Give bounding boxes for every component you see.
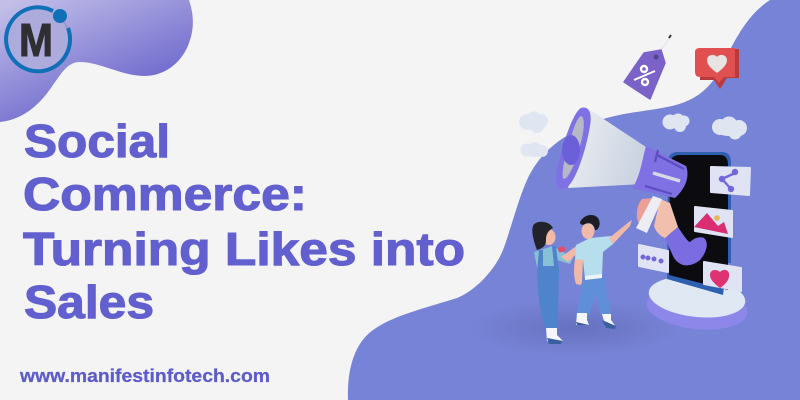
card: heart [704, 262, 741, 291]
title: Turning Likes into [23, 223, 465, 275]
background blob: right [348, 0, 800, 400]
person: man [574, 215, 632, 329]
title: Sales [24, 276, 154, 328]
heart [707, 55, 727, 73]
ground shadow [470, 300, 680, 356]
title: Social [24, 115, 170, 167]
title [23, 115, 465, 328]
card: share [711, 167, 750, 195]
card: chat dots [639, 245, 668, 272]
icon: like speech bubble [695, 48, 739, 89]
icon: discount tag [624, 35, 671, 99]
percent sign [634, 66, 655, 85]
background blob: top left [0, 0, 193, 122]
website url: www.manifestinfotech.com [19, 366, 270, 386]
megaphone [556, 107, 688, 198]
arm and hand [636, 196, 707, 265]
person: woman [532, 222, 583, 344]
card: image [694, 207, 732, 237]
phone [667, 152, 731, 295]
clouds [519, 112, 747, 157]
phone stand [645, 272, 749, 334]
logo [6, 7, 71, 73]
logo letter: M [19, 14, 53, 66]
title: Commerce: [23, 168, 307, 220]
